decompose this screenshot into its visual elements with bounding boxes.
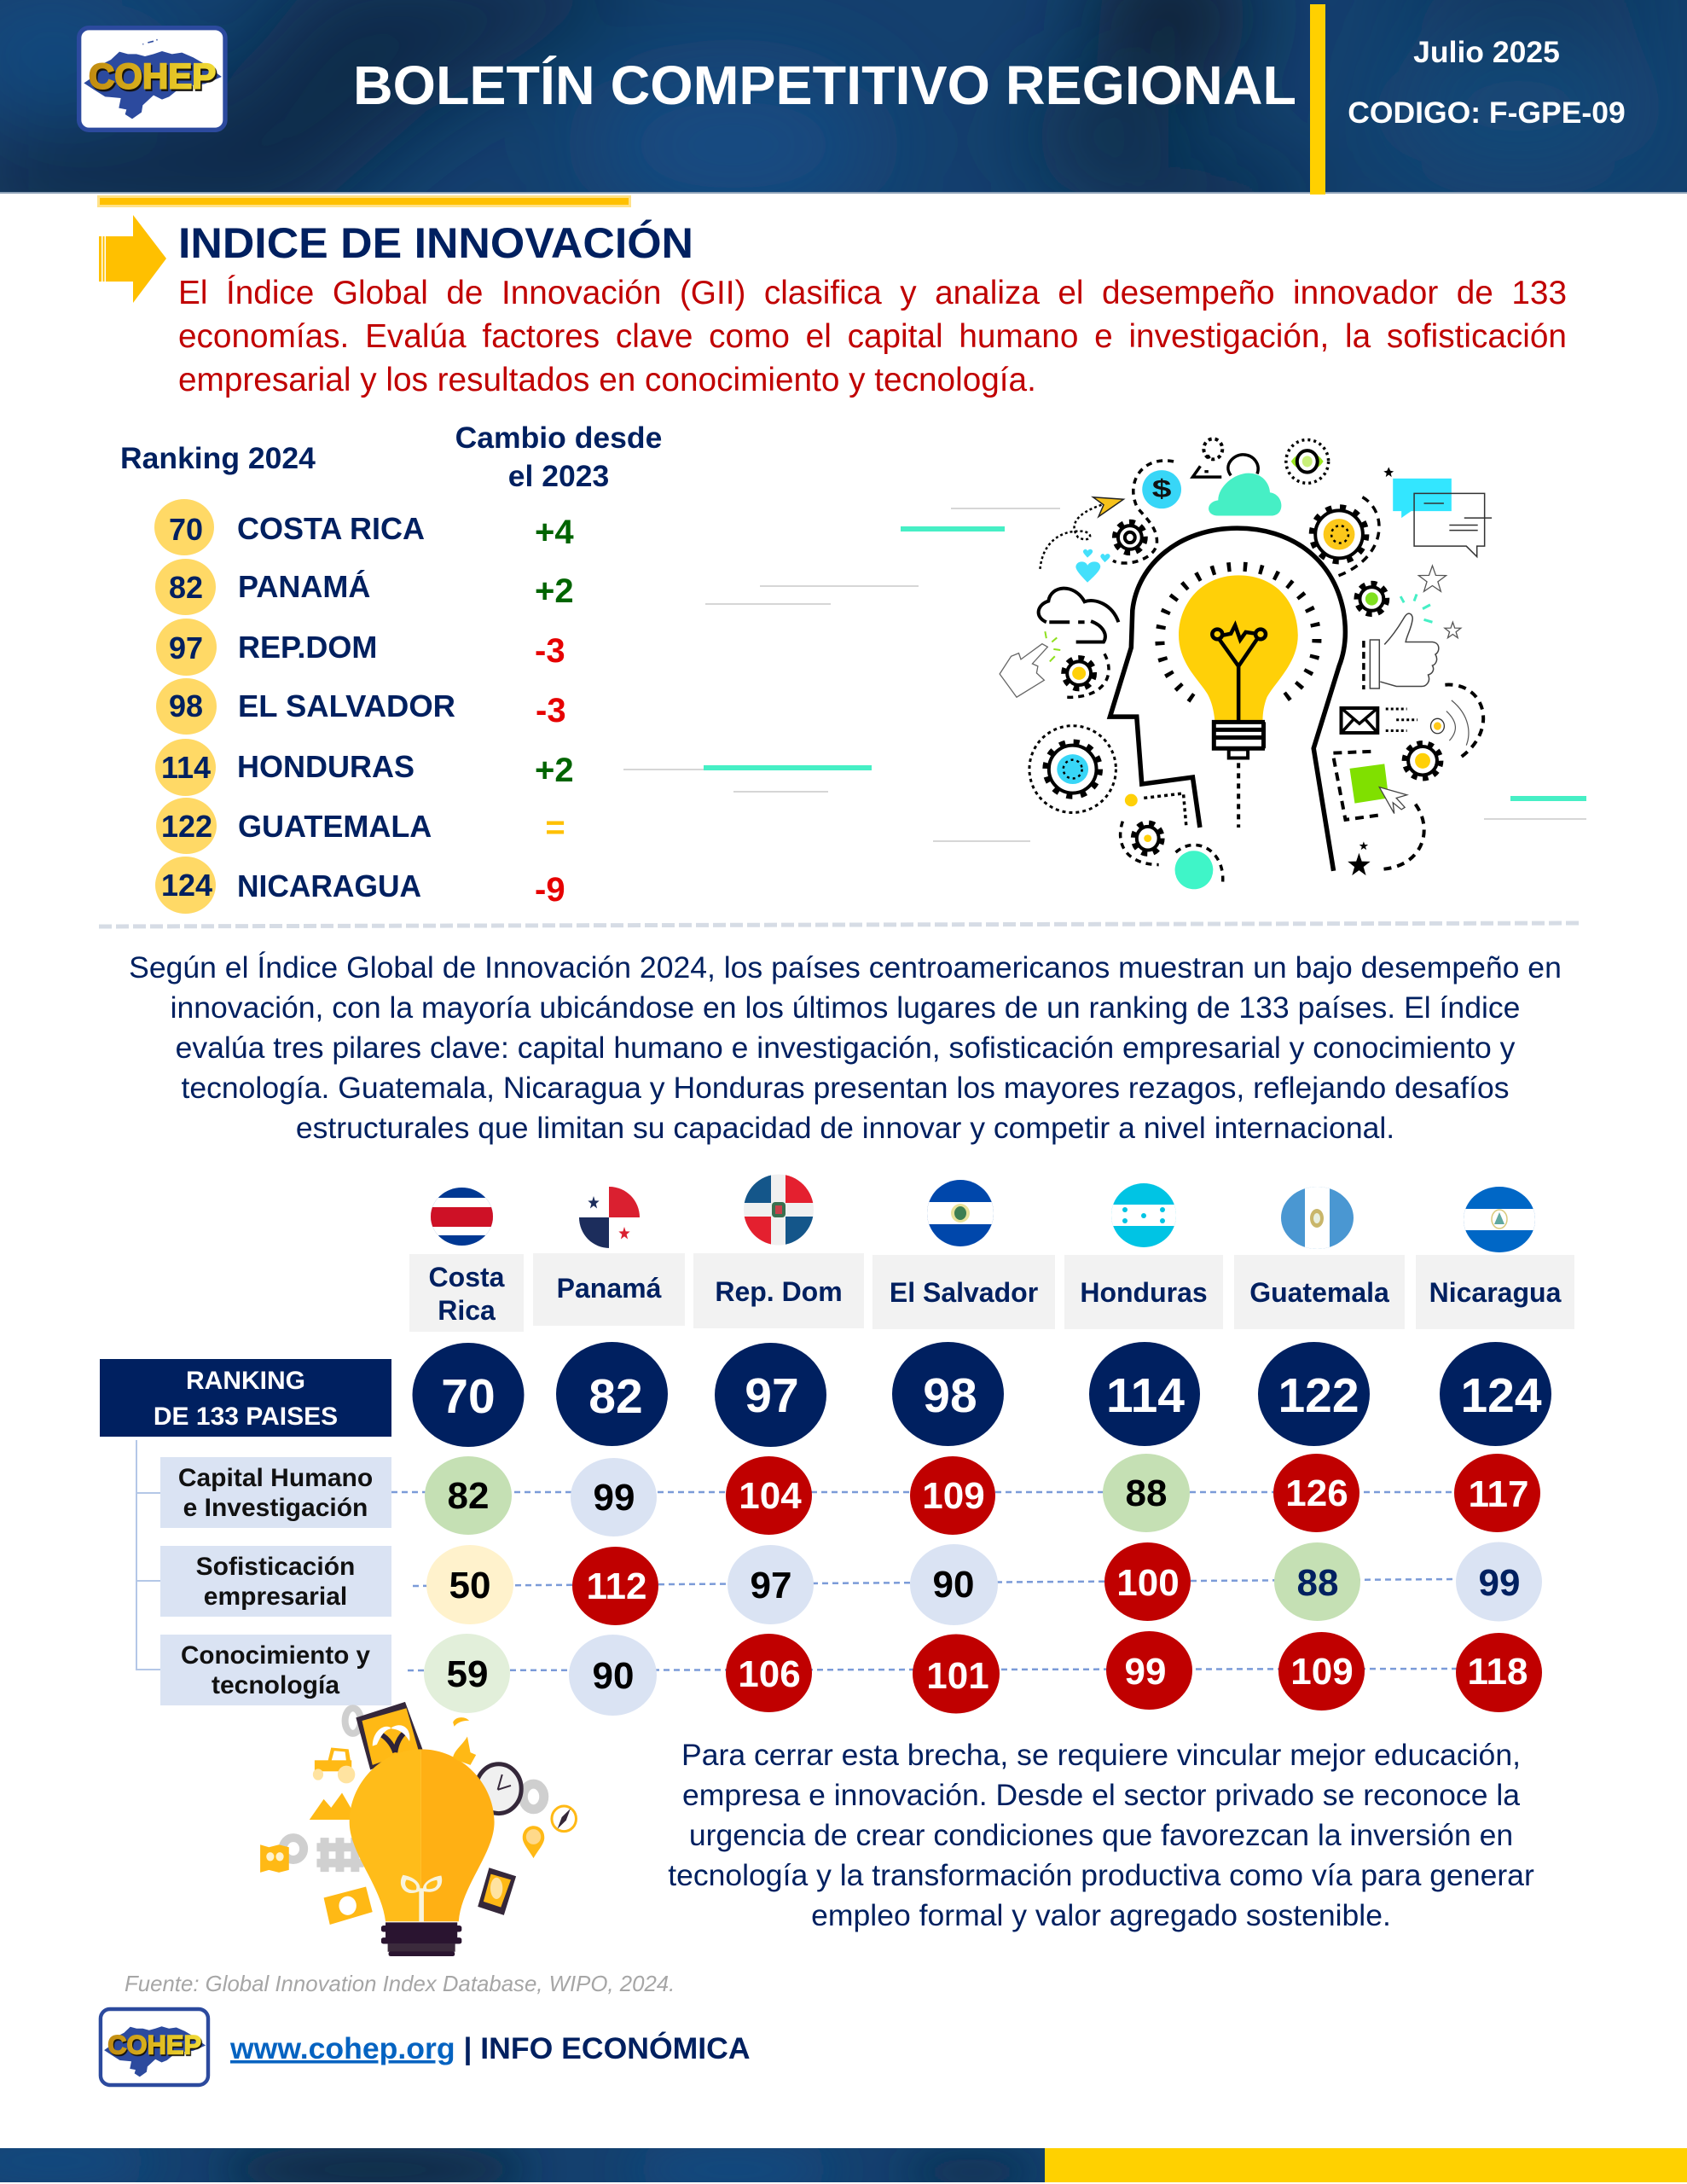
icon: city skyline: [453, 1717, 476, 1765]
rank: El Salvador: 98: [923, 1368, 977, 1423]
column heading: Nicaragua: [1416, 1255, 1574, 1329]
intro paragraph: empresarial y los resultados en conocimiento y tecnología.: [178, 362, 1036, 398]
icon: mountains: [310, 1792, 351, 1820]
value: 59: 59: [447, 1653, 488, 1695]
flag: Costa Rica: [431, 1188, 493, 1246]
icon: gray gears: [283, 1708, 544, 1860]
row label: capital humano: Capital Humano: [178, 1464, 373, 1492]
analysis paragraph: [129, 950, 1562, 1145]
analysis paragraph: evalúa tres pilares clave: capital humano e investigación, sofisticación empresarial y conocimiento y: [176, 1031, 1516, 1065]
column heading: Guatemala: [1234, 1255, 1405, 1329]
icon: dollar coin: $: [1152, 474, 1172, 503]
column heading: change: el 2023: [508, 459, 609, 493]
icon: map pin: [523, 1826, 544, 1858]
row: Rep. Dom: REP.DOM: [238, 630, 377, 665]
value: 88: [1103, 1454, 1190, 1532]
row: Nicaragua: NICARAGUA: [237, 868, 421, 903]
flag: Honduras: [1111, 1183, 1176, 1247]
value: 59: [424, 1634, 510, 1713]
column heading: Panamá: [533, 1253, 685, 1326]
flag: El Salvador: [927, 1180, 994, 1246]
rank: Nicaragua: [1440, 1342, 1551, 1446]
rank: Guatemala: [1258, 1342, 1370, 1446]
row: Costa Rica: 70: [169, 512, 203, 547]
document code: CODIGO: F-GPE-09: [1348, 96, 1626, 130]
analysis paragraph: Según el Índice Global de Innovación 2024, los países centroamericanos muestran un bajo desempeño en: [129, 950, 1562, 985]
value: 106: [726, 1634, 812, 1712]
value: 109: [1278, 1632, 1365, 1711]
value: 118: 118: [1468, 1651, 1528, 1693]
value: 109: 109: [1290, 1651, 1354, 1693]
value: 112: 112: [587, 1565, 646, 1607]
website and section label: www.cohep.org | INFO ECONÓMICA: [229, 2031, 751, 2065]
value: 101: 101: [926, 1655, 989, 1697]
row: El Salvador: 98: [169, 688, 203, 723]
icon: envelope and signal: [1342, 685, 1483, 759]
header banner: [0, 0, 1687, 194]
row label: sofisticación: Sofisticación: [196, 1553, 355, 1581]
row: Guatemala: =: [545, 809, 565, 846]
column heading: El Salvador: [872, 1255, 1055, 1329]
date: Julio 2025: [1413, 35, 1560, 69]
icon: compass: [552, 1806, 577, 1832]
value: 97: 97: [751, 1565, 791, 1606]
row: Panamá: +2: [535, 572, 574, 610]
flag: República Dominicana: [744, 1174, 814, 1246]
column heading: Rep. Dom: Rep. Dom: [715, 1276, 843, 1307]
row: El Salvador: [156, 678, 566, 735]
value: 99: 99: [594, 1477, 635, 1519]
value: 101: [913, 1635, 1000, 1713]
analysis paragraph: estructurales que limitan su capacidad de innovar y competir a nivel internacional.: [296, 1111, 1394, 1145]
ranking circles row: [413, 1342, 1551, 1447]
closing paragraph: empleo formal y valor agregado sostenible.: [811, 1898, 1391, 1932]
rank: Panamá: [556, 1342, 668, 1446]
icon: fence: [316, 1838, 364, 1872]
value: 99: [1106, 1631, 1192, 1710]
intro paragraph: El Índice Global de Innovación (GII) clasifica y analiza el desempeño innovador de 133: [178, 275, 1567, 311]
row label: ranking: RANKING: [186, 1367, 305, 1395]
value: 126: 126: [1285, 1472, 1348, 1514]
yellow header divider: [1310, 4, 1325, 195]
icon: gear bottom: [1121, 822, 1162, 865]
icon: pointing hand: [1000, 631, 1060, 697]
row: Honduras: [155, 739, 574, 796]
intro paragraph: [178, 275, 1567, 398]
closing paragraph: empresa e innovación. Desde el sector privado se reconoce la: [682, 1778, 1520, 1812]
intro paragraph: economías. Evalúa factores clave como el capital humano e investigación, la sofisticación: [178, 318, 1567, 355]
column heading: Nicaragua: Nicaragua: [1429, 1277, 1562, 1308]
icon: stars: [1418, 566, 1461, 638]
value: 99: [1456, 1542, 1542, 1621]
head outline: [1110, 528, 1345, 871]
icon: bulb body: [350, 1749, 495, 1921]
title: BOLETÍN COMPETITIVO REGIONAL: [353, 55, 1296, 116]
rank: Panamá: 82: [588, 1369, 643, 1424]
value: 99: 99: [1125, 1651, 1166, 1693]
row: Nicaragua: -9: [535, 871, 565, 909]
column heading: change: Cambio desde: [455, 421, 662, 455]
value: 90: [569, 1635, 657, 1716]
row: Costa Rica: COSTA RICA: [237, 511, 425, 546]
closing paragraph: [668, 1738, 1534, 1932]
analysis paragraph: innovación, con la mayoría ubicándose en los últimos lugares de un ranking de 133 países. El índice: [171, 990, 1520, 1025]
rank: Honduras: 114: [1106, 1368, 1185, 1423]
value: 100: 100: [1116, 1562, 1180, 1604]
row: Honduras: 114: [161, 750, 211, 785]
value: 99: [571, 1458, 657, 1536]
illustration: yellow bulb with icons: [260, 1702, 577, 1956]
row label: conocimiento: tecnología: [212, 1671, 339, 1699]
conocimiento circles row: [424, 1631, 1542, 1716]
rank: Rep. Dom: 97: [745, 1368, 799, 1423]
icon: black stars: [1348, 841, 1371, 875]
value: 104: [726, 1456, 812, 1535]
row: El Salvador: -3: [536, 692, 566, 729]
logo: COHEP footer: [101, 2009, 208, 2085]
illustration: head with light bulb and icons: [623, 439, 1586, 889]
logo: COHEP footer: COHEP: [107, 2030, 201, 2060]
row: Guatemala: [156, 798, 565, 854]
row: Nicaragua: [155, 857, 565, 914]
value: 106: 106: [738, 1653, 801, 1695]
icon: thumbs up: [1364, 595, 1439, 689]
row: Panamá: PANAMÁ: [238, 569, 370, 604]
value: 112: [572, 1547, 658, 1625]
value: 88: 88: [1126, 1472, 1167, 1514]
icon: cloud outline left: [1039, 589, 1118, 642]
icon: gear left: [1064, 653, 1109, 697]
column heading: Costa Rica: [409, 1254, 524, 1332]
rank: Nicaragua: 124: [1460, 1368, 1542, 1423]
rank: Costa Rica: [413, 1343, 524, 1447]
row: Rep. Dom: 97: [169, 630, 203, 665]
row label: ranking: DE 133 PAISES: [154, 1403, 338, 1431]
rank: Costa Rica: 70: [441, 1369, 496, 1424]
row label: conocimiento: Conocimiento y: [181, 1641, 370, 1670]
closing paragraph: urgencia de crear condiciones que favorezcan la inversión en: [689, 1818, 1513, 1852]
icon: connector with dot: [1125, 793, 1186, 828]
icon: dollar coin: [1113, 461, 1181, 563]
yellow accent strip: [97, 195, 631, 207]
rank: Rep. Dom: [715, 1343, 826, 1447]
value: 118: [1456, 1633, 1542, 1712]
flag: Nicaragua: [1464, 1187, 1535, 1253]
icon: yellow gear right: [1405, 743, 1441, 779]
flag: Panamá: [579, 1187, 640, 1248]
icon: green square with cursor: [1333, 752, 1424, 869]
sofisticación circles row: [426, 1542, 1542, 1625]
icon: teal circle: [1175, 845, 1223, 889]
value: 90: 90: [933, 1564, 974, 1606]
value: 82: 82: [448, 1475, 489, 1517]
row label: capital humano: e Investigación: [183, 1494, 368, 1522]
value: 88: 88: [1297, 1562, 1338, 1604]
icon: hearts: [1075, 549, 1110, 583]
icon: map: [260, 1844, 289, 1873]
dashed divider: [99, 923, 1580, 926]
icon: camera: [324, 1887, 373, 1925]
value: 90: [910, 1544, 998, 1625]
row label: conocimiento: [160, 1635, 391, 1705]
closing paragraph: tecnología y la transformación productiva como vía para generar: [668, 1858, 1534, 1892]
icon: bulb base: [381, 1922, 461, 1956]
row: Honduras: +2: [535, 752, 574, 789]
row: Guatemala: GUATEMALA: [238, 809, 432, 844]
value: 50: 50: [449, 1565, 490, 1606]
icon: speech bubbles: [1383, 467, 1492, 557]
icon: tractor: [313, 1748, 355, 1783]
column heading: Costa Rica: Costa: [429, 1262, 505, 1292]
value: 50: [426, 1545, 513, 1624]
column heading: Honduras: Honduras: [1080, 1277, 1208, 1308]
icon: paper plane: [1040, 497, 1123, 570]
value: 82: [425, 1456, 512, 1535]
flag: Guatemala: [1281, 1187, 1354, 1249]
icon: clock: [476, 1764, 521, 1814]
column heading: Panamá: Panamá: [557, 1273, 662, 1304]
closing paragraph: Para cerrar esta brecha, se requiere vincular mejor educación,: [681, 1738, 1521, 1772]
icon: gear top right: [1312, 497, 1379, 576]
ranking list: [120, 421, 662, 914]
logo: COHEP header: COHEP: [89, 55, 216, 96]
column heading: Honduras: [1064, 1255, 1223, 1329]
rank: El Salvador: [892, 1342, 1004, 1446]
row: Costa Rica: [154, 499, 574, 555]
heading: INDICE DE INNOVACIÓN: [178, 219, 693, 267]
value: 126: [1273, 1454, 1359, 1532]
value: 104: 104: [739, 1475, 802, 1517]
row: Rep. Dom: [156, 619, 565, 676]
icon: green gear: [1356, 584, 1387, 614]
value: 99: 99: [1479, 1562, 1520, 1604]
source note: Fuente: Global Innovation Index Database, WIPO, 2024.: [125, 1972, 675, 1996]
value: 100: [1104, 1542, 1191, 1621]
value: 97: [728, 1545, 814, 1624]
row: Guatemala: 122: [161, 809, 212, 844]
value: 117: 117: [1469, 1473, 1528, 1515]
icon: top clouds and mountain: [1192, 439, 1281, 516]
icon: central bulb: [1160, 566, 1317, 828]
row: Costa Rica: +4: [535, 514, 574, 551]
analysis paragraph: tecnología. Guatemala, Nicaragua y Honduras presentan los mayores rezagos, reflejando desafíos: [181, 1071, 1510, 1105]
row: Panamá: 82: [169, 570, 203, 605]
icon: yellow arrow: [99, 215, 166, 303]
logo: COHEP header: [79, 28, 225, 130]
value: 117: [1454, 1454, 1540, 1532]
icon: large gear lower left: [1029, 726, 1116, 812]
row: Nicaragua: 124: [161, 868, 212, 903]
column heading: El Salvador: El Salvador: [890, 1277, 1038, 1308]
row: Rep. Dom: -3: [535, 632, 565, 670]
tree connector: [136, 1440, 160, 1670]
row label: sofisticación: [160, 1546, 391, 1617]
value: 109: [910, 1456, 995, 1535]
icon: phone: [356, 1702, 422, 1769]
value: 109: 109: [922, 1475, 985, 1517]
column heading: Guatemala: Guatemala: [1249, 1277, 1389, 1308]
footer bar: [0, 2148, 1687, 2182]
rank: Guatemala: 122: [1278, 1368, 1359, 1423]
row label: capital humano: [160, 1457, 391, 1528]
row: Honduras: HONDURAS: [237, 749, 415, 784]
column heading: Costa Rica: Rica: [438, 1295, 496, 1326]
icon: eye: [1286, 439, 1329, 483]
rank: Honduras: [1089, 1342, 1200, 1446]
row: El Salvador: EL SALVADOR: [238, 688, 455, 723]
value: 88: [1274, 1542, 1360, 1621]
row label: ranking: [100, 1359, 391, 1437]
icon: tablet: [478, 1867, 516, 1915]
column heading: Rep. Dom: [693, 1253, 864, 1328]
capital humano circles row: [425, 1454, 1540, 1536]
value: 90: 90: [593, 1655, 634, 1697]
column heading: ranking: Ranking 2024: [120, 441, 316, 475]
row: Panamá: [155, 559, 574, 615]
icon: gear top left: [1115, 522, 1145, 553]
row label: sofisticación: empresarial: [204, 1583, 347, 1611]
